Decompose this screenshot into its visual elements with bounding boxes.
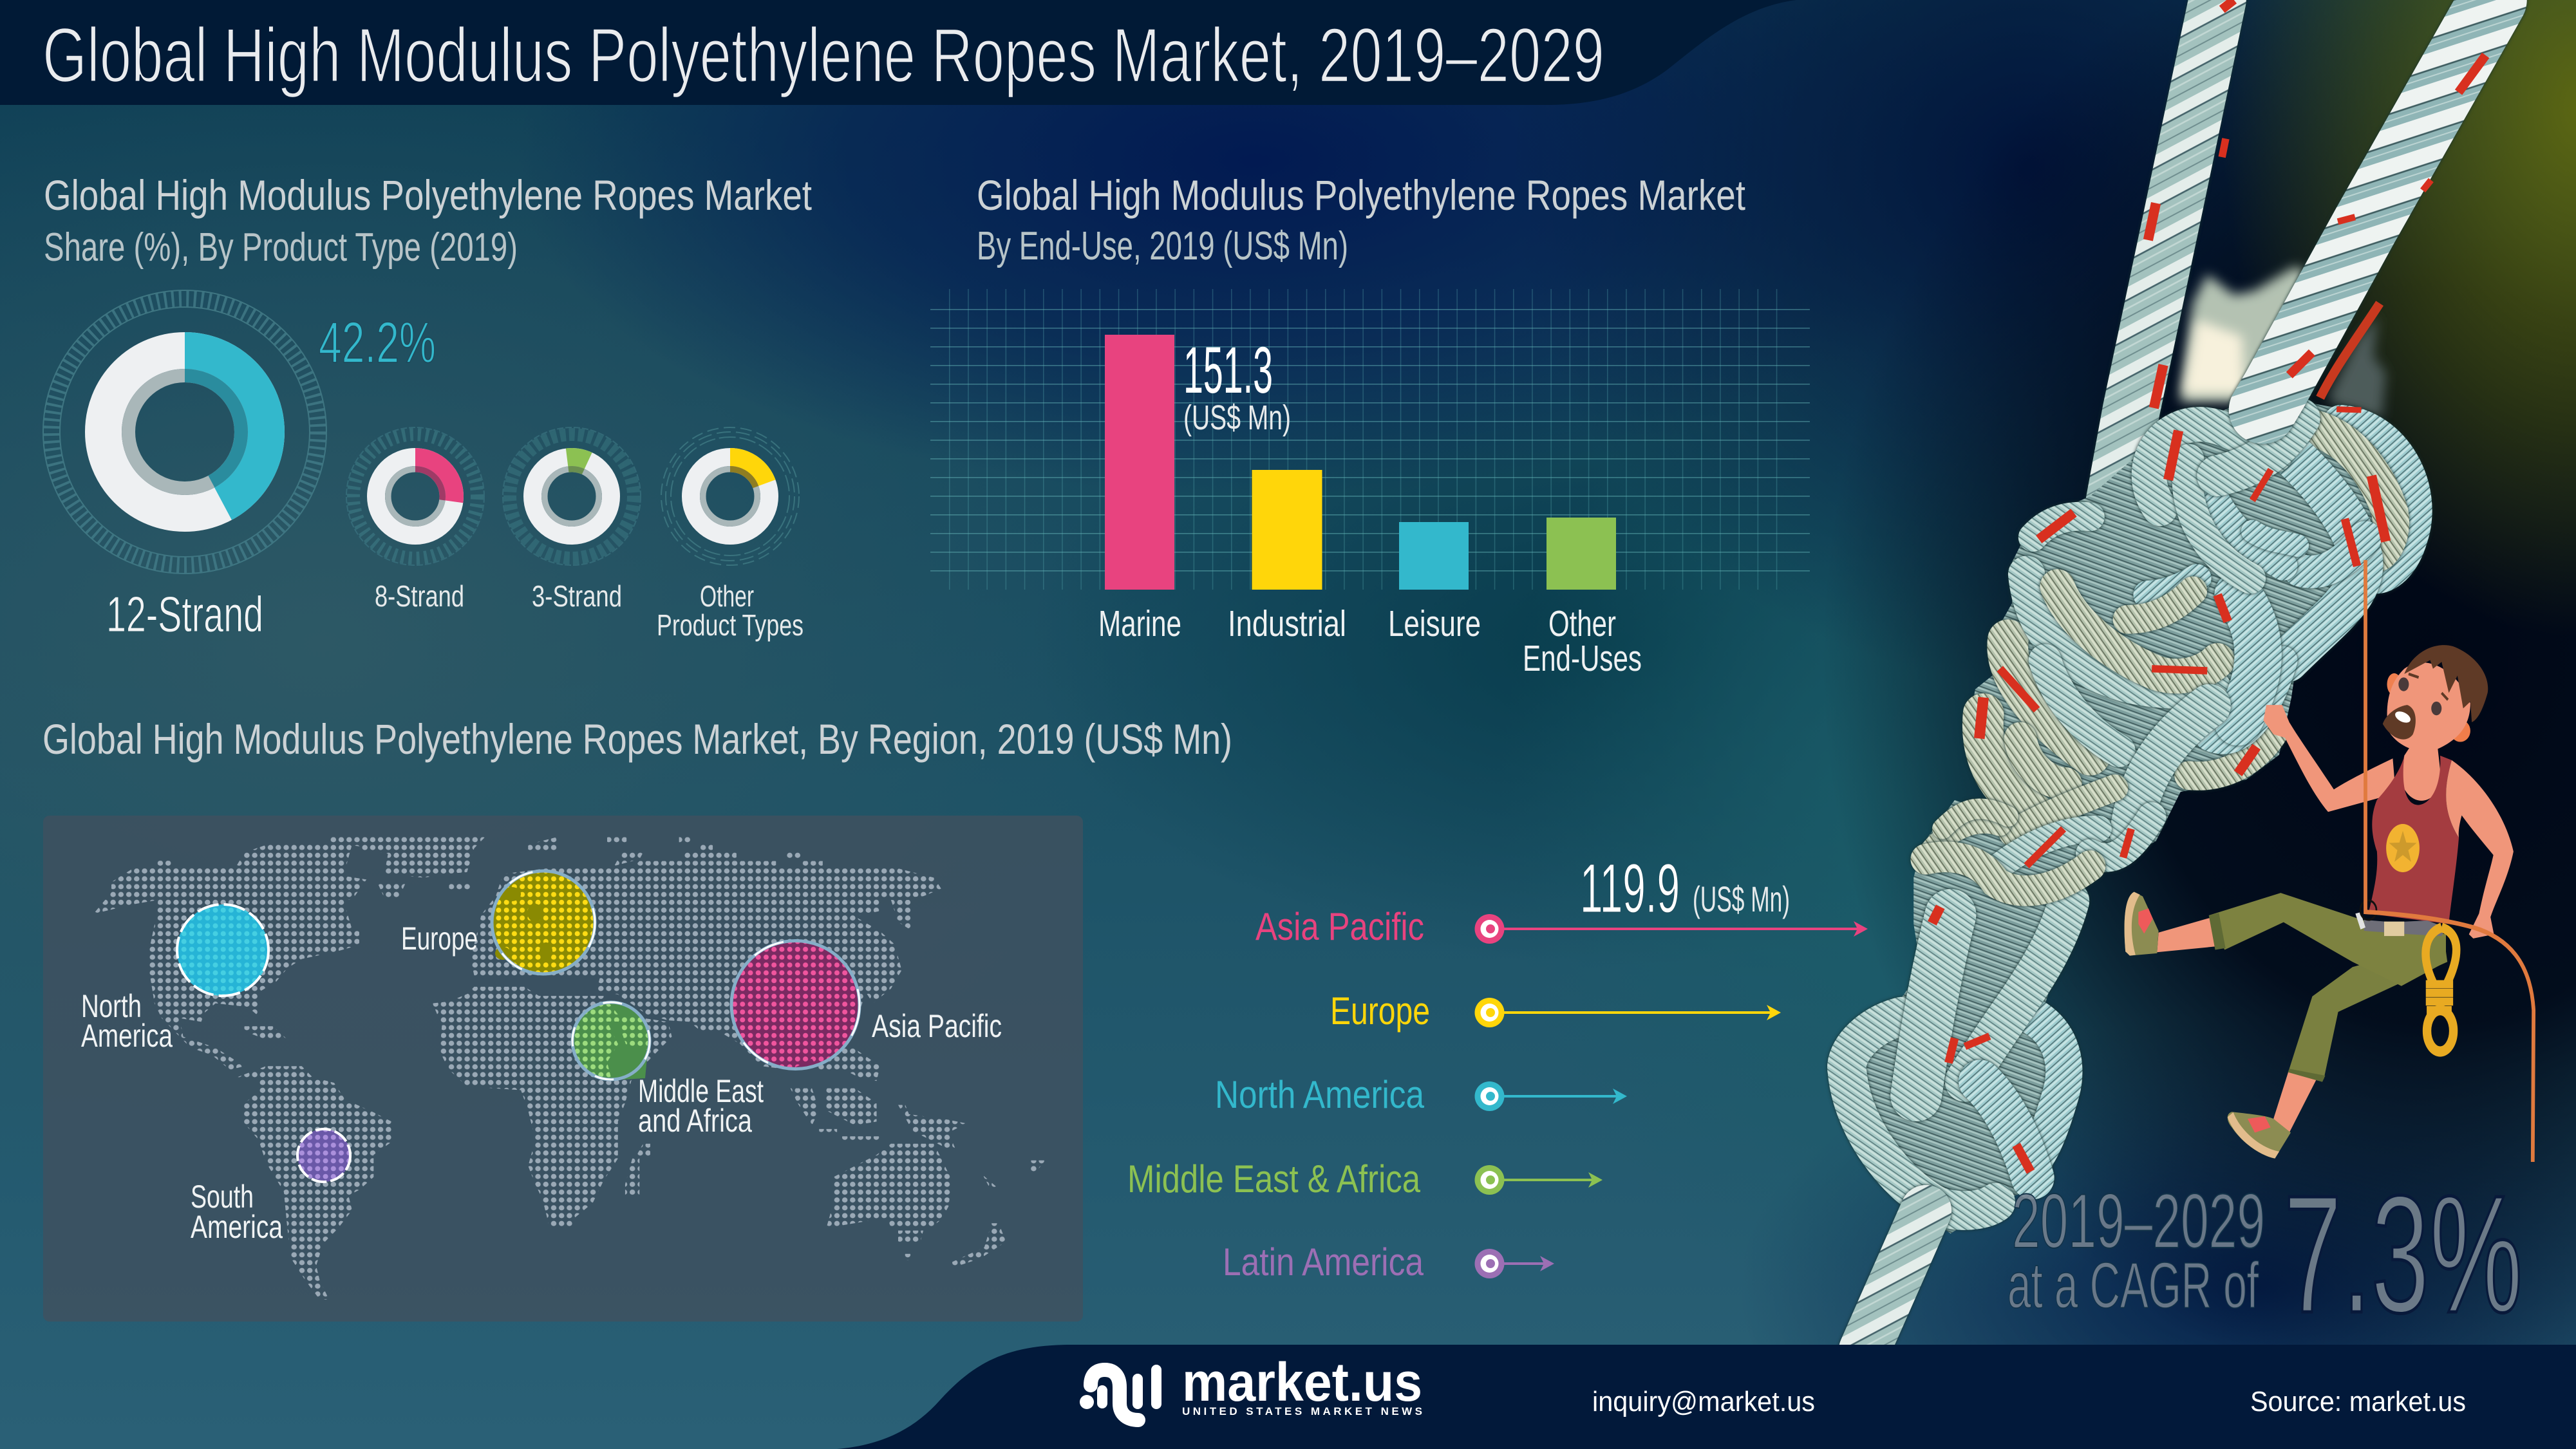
donut: 8-strand [346,427,484,565]
label: 12-Strand: 12-Strand [106,586,263,642]
bar labels: End-Uses [1523,638,1642,679]
climber: right arm [2446,760,2514,939]
map labels: and Africa [638,1103,752,1139]
bubble: Asia Pacific [730,939,861,1070]
knot strands [1926,422,2415,866]
title: Global High Modulus Polyethylene Ropes Market, 2019–2029 [42,12,1604,98]
donut: 3-strand [503,427,641,565]
label: other product types [657,579,804,642]
value: 42.2%: 42.2% [319,311,436,375]
bar labels: Marine [1098,603,1181,644]
rope strand: upper left [2104,0,2217,615]
map labels: Europe [401,921,478,957]
label: 8-Strand: 8-Strand [375,579,464,613]
climber: star badge [2386,824,2420,872]
bar labels: Other [1548,603,1616,644]
map labels: America [81,1018,173,1054]
climber: calves [2157,918,2317,1132]
map labels: North [81,988,142,1024]
panel: share by product type [43,171,812,642]
bar: Industrial [1252,470,1322,590]
row: Europe: Europe [1330,989,1430,1033]
value: 151.3: (US$ Mn) [1183,398,1291,437]
value: 151.3 [1183,333,1291,437]
heading: product type [44,171,812,270]
heading: product type: Share (%), By Product Type (2019) [44,225,518,270]
row: Asia Pacific [1255,905,1868,948]
logo: market.us [1080,1352,1422,1420]
logo: market.us: UNITED STATES MARKET NEWS [1182,1405,1422,1417]
row: North America [1215,1073,1627,1116]
heading: product type: Global High Modulus Polyethylene Ropes Market [44,171,812,219]
climber: neck [2402,745,2441,801]
bar: Marine [1105,335,1174,590]
heading: end-use: By End-Use, 2019 (US$ Mn) [977,224,1348,268]
donut: 12-strand [43,290,326,574]
frayed rope end [2181,266,2386,418]
climber: shoes [2125,892,2291,1159]
bubble: Middle East and Africa [570,1000,652,1081]
label: 3-Strand: 3-Strand [532,579,622,613]
footer band [837,1345,2576,1449]
bar labels: Leisure [1388,603,1481,644]
climber: head [2383,645,2488,751]
map labels: America [191,1209,283,1245]
map labels: South [191,1179,254,1215]
donut: other product types [661,427,799,565]
heading: by region: Global High Modulus Polyethylene Ropes Market, By Region, 2019 (US$ Mn) [42,715,1232,763]
contact email: inquiry@market.us [1592,1386,1815,1417]
row: Asia Pacific: Asia Pacific [1255,905,1424,948]
knot mass [1842,402,2423,1233]
climber: belt [2355,901,2446,936]
value: 119.9: 119.9 [1580,849,1680,927]
panel: end-use bar chart [930,171,1810,679]
heading: end-use: Global High Modulus Polyethylene Ropes Market [977,171,1745,219]
bubble: North America [176,903,270,997]
dotted world map [93,837,1046,1300]
map labels: Middle East [638,1073,764,1109]
panel: regional ranking [1127,849,1868,1284]
logo: market.us: market.us [1182,1352,1422,1412]
climber: orange climbing rope [2365,560,2534,1162]
bar labels [1098,603,1642,679]
bar: Other End-Uses [1547,518,1616,590]
rope photo illustration [1842,0,2493,1351]
CAGR callout: at a CAGR of [2007,1249,2259,1322]
heading: end-use [977,171,1745,268]
lower rope strands [1847,857,2090,1351]
value: 151.3: 151.3 [1183,333,1273,407]
map labels [81,921,1002,1245]
bar labels: Industrial [1228,603,1346,644]
rope strand: upper right [2217,0,2493,476]
climber illustration [2125,560,2534,1162]
climber: raised arm [2264,705,2396,812]
CAGR callout: 2019–2029 [2012,1178,2265,1264]
bubble: South America [296,1128,352,1183]
bubble: Europe [491,869,596,976]
label: other product types: Other [700,579,754,613]
row: Latin America: Latin America [1223,1240,1424,1284]
bar: Leisure [1399,522,1469,590]
climber: rope coil [2426,928,2456,1052]
source: Source: market.us [2250,1386,2466,1417]
panel: world map [43,816,1083,1322]
CAGR callout [2007,1161,2523,1348]
red rope fibres [1932,0,2486,1172]
label: other product types: Product Types [657,608,804,642]
row: North America: North America [1215,1073,1425,1116]
header band [0,0,1796,105]
climber: legs [2209,893,2447,1082]
map labels: Asia Pacific [872,1008,1002,1044]
value: 119.9: (US$ Mn) [1693,879,1790,919]
row: Middle East & Africa: Middle East & Africa [1127,1157,1421,1201]
row: Europe [1330,989,1781,1033]
climber: tank top [2368,756,2459,924]
